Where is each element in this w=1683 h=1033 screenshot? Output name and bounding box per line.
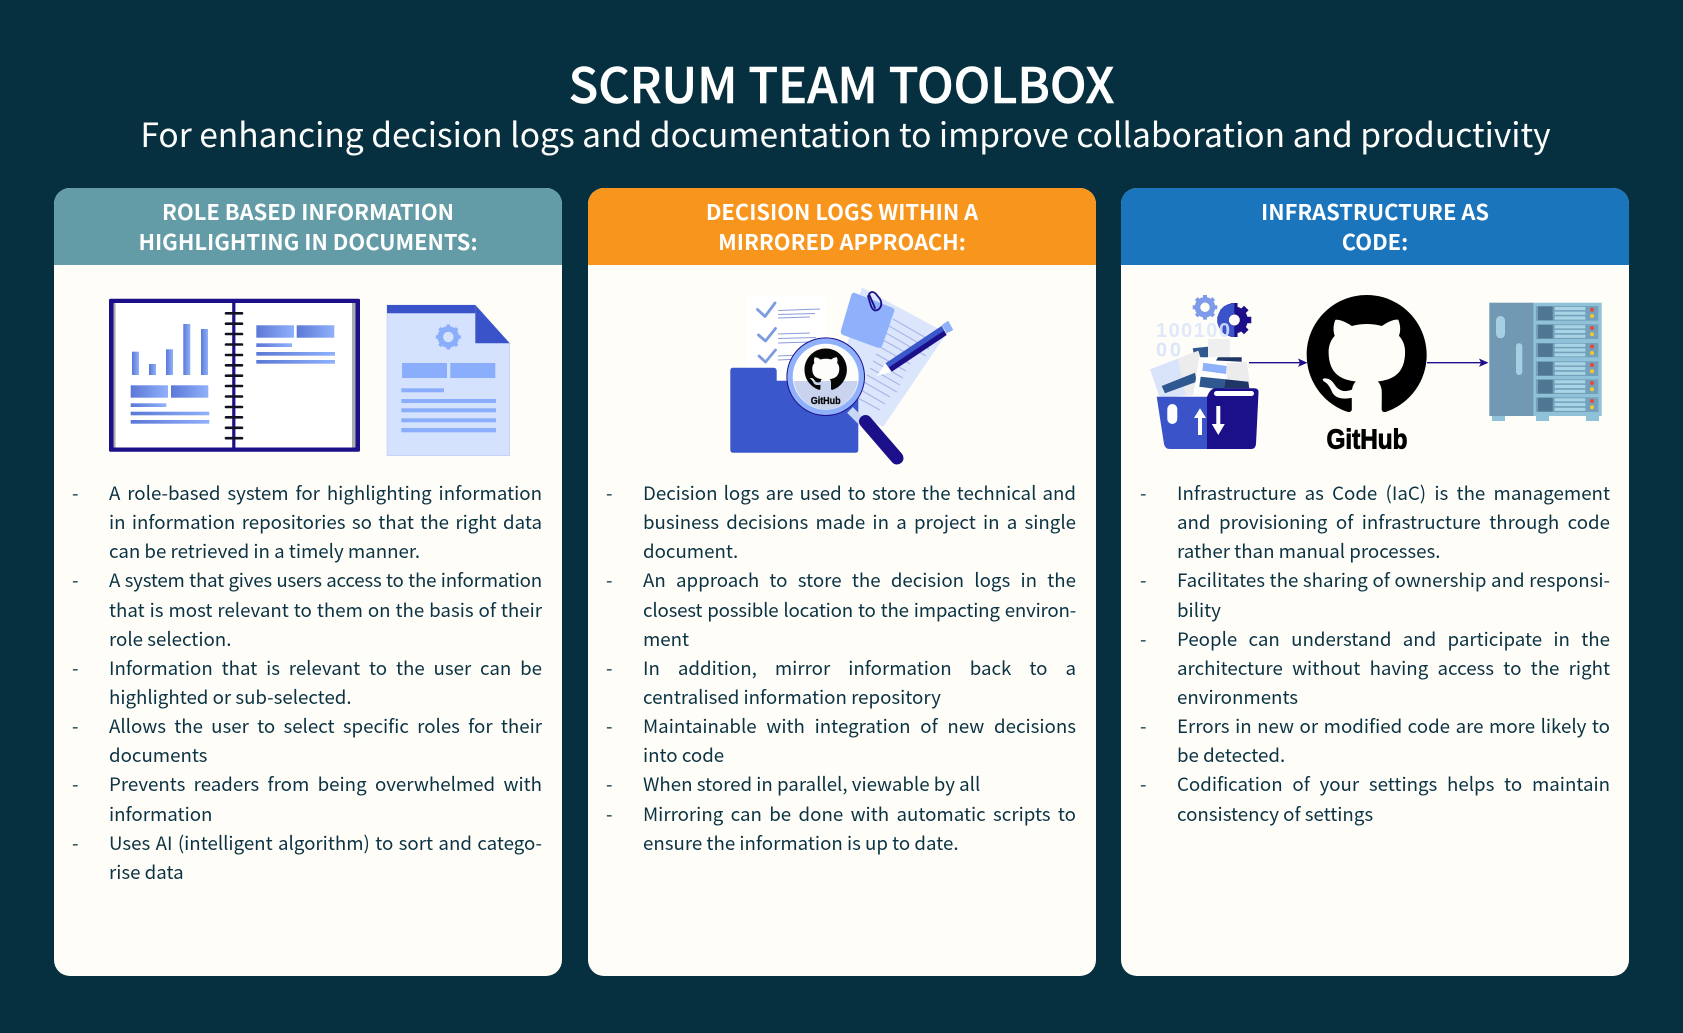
bullet [72, 770, 542, 827]
bullet: bility [1177, 596, 1221, 623]
panel: infrastructure as code [1121, 188, 1629, 976]
bullet: Prevents readers from being overwhelmed with [109, 770, 542, 797]
panel: role based information highlighting [54, 188, 562, 976]
text: - [606, 800, 612, 827]
bullet [1140, 479, 1610, 564]
bullet: Maintainable with integration of new decisions [643, 712, 1076, 739]
bullet [1140, 712, 1610, 768]
bullet: business decisions made in a project in a single [643, 508, 1076, 535]
magnifier [786, 337, 897, 458]
panel heading: infrastructure as code: CODE: [1342, 226, 1408, 257]
panel heading: decision logs [588, 188, 1096, 265]
text: - [1140, 566, 1146, 593]
text: - [606, 566, 612, 593]
bullet [1140, 770, 1610, 827]
arrow: folder to GitHub [1249, 358, 1308, 367]
panel heading: decision logs: DECISION LOGS WITHIN A [706, 196, 978, 227]
text: - [606, 770, 612, 797]
bullet: information [109, 800, 212, 827]
text: - [1140, 770, 1146, 797]
bullet: People can understand and participate in the [1177, 625, 1610, 652]
text: - [606, 654, 612, 681]
bullet: rise data [109, 858, 184, 885]
panel heading: infrastructure as code: INFRASTRUCTURE AS [1261, 196, 1489, 227]
bullet [72, 829, 542, 885]
bullet: ment [643, 625, 689, 652]
icon: GitHub logo with wordmark: GitHub [1326, 423, 1408, 454]
bullet: closest possible location to the impacting environ- [643, 596, 1076, 623]
panel heading: role based information: ROLE BASED INFORMATION [162, 196, 454, 227]
text: - [1140, 625, 1146, 652]
folder [730, 368, 858, 453]
bullet: highlighted or sub-selected. [109, 683, 352, 710]
bullet [72, 712, 542, 768]
title: SCRUM TEAM TOOLBOX [569, 47, 1114, 117]
bullet [606, 800, 1076, 856]
bullet [1140, 566, 1610, 623]
bullet: centralised information repository [643, 683, 941, 710]
arrow: GitHub to server [1427, 358, 1488, 367]
panel heading: infrastructure as code [1121, 188, 1629, 265]
bullet: and provisioning of infrastructure through code [1177, 508, 1610, 535]
bullet: An approach to store the decision logs in the [643, 566, 1076, 593]
bullet: Uses AI (intelligent algorithm) to sort and catego- [109, 829, 542, 856]
bullet [72, 566, 542, 652]
text: - [72, 712, 78, 739]
bullet: in information repositories so that the right data [109, 508, 542, 535]
panel: decision logs [588, 188, 1096, 976]
bullet: consistency of settings [1177, 800, 1373, 827]
text block: infrastructure bullets [1140, 479, 1610, 827]
bullet [606, 654, 1076, 710]
text: - [606, 479, 612, 506]
bullet: into code [643, 741, 724, 768]
rotated document [832, 287, 947, 427]
bullet: can be retrieved in a timely manner. [109, 537, 420, 564]
bullet: In addition, mirror information back to a [643, 654, 1076, 681]
panel heading: role based information: HIGHLIGHTING IN DOCUMENTS: [138, 226, 478, 257]
icon: document with gear [386, 304, 510, 456]
text block: decision log bullets [606, 479, 1076, 856]
bullet: Mirroring can be done with automatic scripts to [643, 800, 1076, 827]
bullet: environments [1177, 683, 1298, 710]
bullet: Information that is relevant to the user can be [109, 654, 542, 681]
text: - [72, 479, 78, 506]
bullet [606, 566, 1076, 652]
text: - [72, 829, 78, 856]
icon: data folder with gears [1150, 295, 1258, 449]
bullet: document. [643, 537, 738, 564]
bullet: documents [109, 741, 207, 768]
icon: server rack [1489, 302, 1602, 421]
pencil [877, 321, 953, 376]
text block: role based bullets [72, 479, 542, 885]
bullet: A role-based system for highlighting information [109, 479, 542, 506]
bullet: Allows the user to select specific roles for their [109, 712, 542, 739]
bullet: architecture without having access to the right [1177, 654, 1610, 681]
bullet: Codification of your settings helps to maintain [1177, 770, 1610, 797]
papers [1150, 339, 1252, 398]
bullet: ensure the information is up to date. [643, 829, 959, 856]
bullet: be detected. [1177, 741, 1285, 768]
text: - [1140, 479, 1146, 506]
text: - [72, 566, 78, 593]
bullet [72, 654, 542, 710]
text: - [72, 770, 78, 797]
magnifier: GitHub [811, 395, 841, 407]
binary digits: 100100 [1156, 320, 1230, 342]
bullet: Facilitates the sharing of ownership and responsi- [1177, 566, 1610, 593]
checklist paper [746, 296, 826, 381]
bullet [72, 479, 542, 564]
bullet: Infrastructure as Code (IaC) is the management [1177, 479, 1610, 506]
gears [1193, 295, 1251, 337]
bullet: Errors in new or modified code are more likely to [1177, 712, 1610, 739]
bullet: Decision logs are used to store the technical and [643, 479, 1076, 506]
text: - [1140, 712, 1146, 739]
bullet: A system that gives users access to the information [109, 566, 542, 593]
bullet [606, 712, 1076, 768]
bullet [606, 479, 1076, 564]
text: - [72, 654, 78, 681]
binary digits [1156, 320, 1230, 362]
binary digits: 00 [1156, 340, 1181, 362]
panel heading: role based information [54, 188, 562, 265]
panel heading: decision logs: MIRRORED APPROACH: [718, 226, 966, 257]
folder [1157, 388, 1259, 449]
bullet: When stored in parallel, viewable by all [643, 770, 980, 797]
bullet: that is most relevant to them on the basis of their [109, 596, 542, 623]
subtitle: For enhancing decision logs and documentation to improve collaboration and productivity [140, 108, 1551, 157]
bullet: rather than manual processes. [1177, 537, 1440, 564]
text: - [606, 712, 612, 739]
icon: GitHub logo with wordmark [1306, 295, 1427, 454]
bullet [1140, 625, 1610, 710]
icon: folder, checklist, magnifier with GitHub logo and pencil [730, 287, 954, 464]
icon: open notebook with charts [109, 298, 360, 452]
bullet: role selection. [109, 625, 231, 652]
